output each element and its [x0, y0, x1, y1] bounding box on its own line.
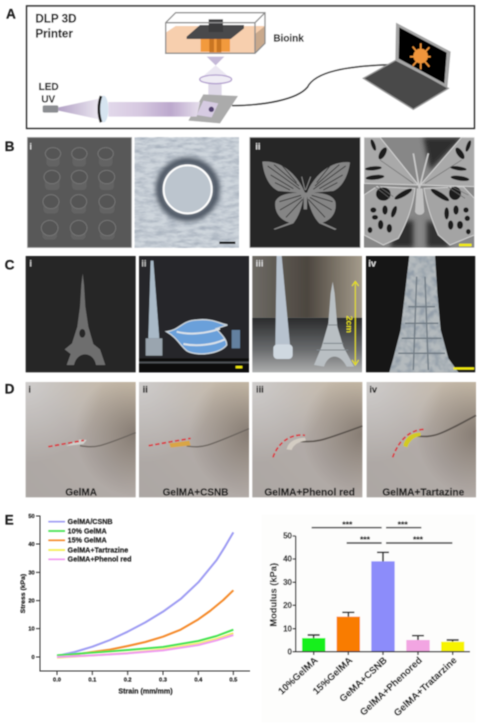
label i: i — [28, 385, 31, 395]
label iv: iv — [369, 385, 378, 395]
B i: ring array model — [27, 137, 132, 248]
significance bars: *** — [413, 535, 424, 545]
label iv: iv — [368, 259, 377, 269]
x-axis tick labels: 0.2 — [124, 678, 132, 684]
y-axis tick labels: 20 — [283, 601, 293, 610]
label: 2cm: 2cm — [345, 316, 355, 333]
y-axis tick labels: 40 — [28, 542, 35, 548]
heading: DLP 3D Printer: Printer — [35, 27, 73, 40]
significance bars: *** — [398, 519, 408, 529]
y-axis tick labels: 0 — [32, 655, 35, 661]
cable — [232, 65, 391, 106]
D ii: GelMA+CSNB — [139, 382, 249, 499]
label iii: iii — [256, 259, 263, 269]
label: Bioink: Bioink — [273, 33, 304, 44]
y-axis tick labels: 40 — [283, 555, 293, 564]
legend — [48, 518, 131, 564]
label: LED UV: UV — [41, 94, 56, 105]
y-axis title: Stress (kPa) — [20, 574, 27, 613]
label iii: iii — [256, 385, 264, 395]
x-axis category labels: 10%GelMA — [276, 655, 320, 697]
vat with bioink — [166, 13, 265, 53]
B ii: butterfly model — [250, 137, 360, 248]
panel E right: modulus bar chart — [262, 514, 475, 723]
C iii: pipette tip beside tower — [252, 256, 362, 372]
chart background — [262, 514, 475, 723]
C iv: tower close-up — [366, 256, 475, 372]
y-axis title: Modulus (kPa) — [268, 563, 278, 627]
significance bars — [312, 519, 452, 545]
D iv: GelMA+Tartazine — [367, 382, 476, 499]
legend: GelMA+Tartrazine — [68, 546, 128, 554]
y-axis tick labels: 50 — [283, 532, 293, 541]
significance bars: *** — [342, 519, 353, 529]
x-axis category labels: GelMA+Phenored — [358, 655, 425, 718]
panel letter E: E — [5, 512, 14, 527]
curve: GelMA+Phenol red — [57, 635, 233, 657]
x-axis category labels: GeMA+CSNB — [338, 655, 390, 705]
panel C: Eiffel tower prints — [5, 256, 475, 372]
x-axis tick labels: 0.3 — [159, 678, 167, 684]
panel D: bending tests — [5, 381, 476, 499]
laptop — [363, 23, 451, 109]
x-axis tick labels: 0.0 — [53, 678, 61, 684]
y-axis tick labels — [283, 532, 293, 656]
C ii: pipette tip and blue print — [139, 256, 249, 372]
panel B: printed models — [5, 137, 474, 248]
projection cone and lens — [200, 57, 232, 100]
caption GelMA: GelMA — [65, 488, 97, 499]
x-axis tick labels: 0.1 — [88, 678, 96, 684]
y-axis tick labels: 30 — [28, 570, 35, 576]
panel letter C: C — [5, 257, 15, 272]
D iii: GelMA+Phenol red — [252, 382, 362, 499]
label: LED UV: LED — [39, 82, 59, 93]
arrow: 2 cm height — [352, 281, 359, 365]
frame of panel A — [27, 6, 474, 128]
C i: tower model — [26, 256, 136, 372]
caption GelMA+CSNB: GelMA+CSNB — [163, 488, 228, 499]
x-axis category labels: 15%GelMA — [311, 655, 355, 697]
curve: 10% GelMA — [57, 630, 233, 655]
y-axis tick labels: 10 — [283, 624, 293, 633]
legend: 10% GelMA — [68, 527, 107, 535]
x-axis category labels — [276, 655, 460, 719]
bars — [302, 561, 464, 652]
y-axis tick labels — [28, 514, 35, 661]
label ii: ii — [143, 385, 148, 395]
significance bars: *** — [360, 535, 371, 545]
y-axis tick labels: 50 — [28, 514, 35, 520]
axes and ticks — [293, 536, 470, 655]
x-axis title: Strain (mm/mm) — [118, 687, 173, 695]
D i: GelMA — [26, 382, 136, 499]
legend: GelMA/CSNB — [68, 518, 113, 526]
panel letter B: B — [5, 139, 15, 154]
UV LED source — [43, 99, 99, 119]
panel letter A: A — [6, 7, 16, 22]
digital mirror plate — [188, 94, 238, 123]
panel E left: stress-strain chart — [5, 512, 250, 695]
y-axis tick labels: 30 — [283, 578, 293, 587]
y-axis tick labels: 10 — [28, 627, 35, 633]
panel letter D: D — [5, 381, 15, 396]
error bars — [308, 552, 459, 642]
x-axis tick labels — [53, 678, 237, 684]
x-axis tick labels: 0.4 — [194, 678, 203, 684]
heading: DLP 3D Printer: DLP 3D — [35, 13, 77, 26]
focusing lens — [99, 96, 108, 122]
y-axis tick labels: 0 — [288, 647, 293, 656]
curve: GelMA/CSNB — [57, 532, 233, 656]
y-axis tick labels: 20 — [28, 599, 35, 605]
B ii: micrograph of butterfly — [364, 137, 474, 248]
caption GelMA+Tartazine: GelMA+Tartazine — [382, 488, 465, 499]
label i: i — [29, 141, 32, 151]
axes and ticks — [36, 516, 250, 675]
x-axis tick labels: 0.5 — [229, 678, 237, 684]
B i: micrograph of printed ring — [135, 137, 239, 248]
panel A: DLP 3D printer schematic — [6, 6, 474, 128]
horizontal light beam — [108, 102, 200, 117]
legend: GelMA+Phenol red — [68, 556, 131, 564]
label ii: ii — [255, 141, 261, 151]
icon: sun on screen — [410, 43, 431, 69]
x-axis category labels: GelMA+Tratarzine — [392, 655, 460, 719]
curve: 15% GelMA — [57, 590, 233, 657]
legend: 15% GelMA — [68, 537, 107, 545]
caption GelMA+Phenol red: GelMA+Phenol red — [264, 488, 355, 499]
label ii: ii — [141, 259, 147, 269]
label i: i — [29, 259, 32, 269]
curve: GelMA+Tartrazine — [57, 633, 233, 658]
